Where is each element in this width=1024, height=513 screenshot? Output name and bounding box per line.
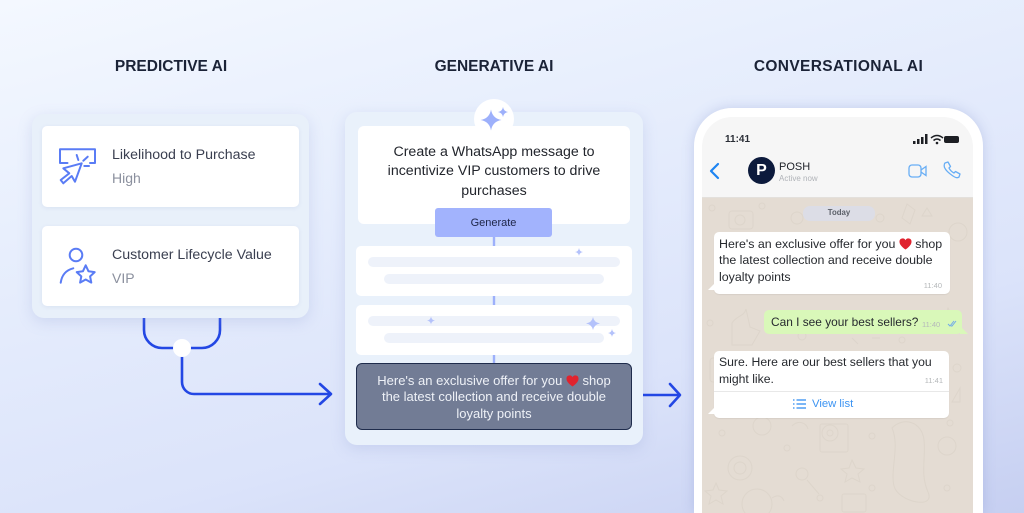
placeholder bar <box>368 316 620 326</box>
message: offer <box>714 232 950 294</box>
wallpaper doodles <box>702 198 973 513</box>
label: likelihood to purchase: Likelihood to Purchase <box>112 147 256 163</box>
placeholder bar <box>384 274 604 284</box>
divider <box>714 391 949 392</box>
reply text: might like. <box>719 372 774 386</box>
bubble tail <box>960 328 968 334</box>
contact name: POSH <box>779 161 810 173</box>
prompt text: Create a WhatsApp message to <box>393 144 595 160</box>
reply text <box>719 355 932 386</box>
card: generated message <box>356 363 632 430</box>
bubble tail <box>708 284 714 290</box>
generated message text <box>377 372 611 421</box>
back chevron <box>710 162 720 180</box>
question text: Can I see your best sellers? <box>771 315 918 329</box>
icon: person with star <box>60 248 96 284</box>
icon: cursor click <box>59 148 96 184</box>
icon: list <box>793 399 806 409</box>
icon: sparkles badge <box>474 99 514 139</box>
timestamp: 11:41 <box>925 376 943 385</box>
message: best sellers reply <box>714 351 949 418</box>
chat area <box>702 197 973 513</box>
heading: predictive AI: PREDICTIVE AI <box>115 58 227 75</box>
sparkle group <box>427 317 616 337</box>
icon: video call <box>908 164 927 178</box>
contact status: Active now <box>779 174 818 183</box>
placeholder bar <box>384 333 604 343</box>
timestamp: 11:40 <box>924 281 942 290</box>
card: prompt <box>358 126 630 224</box>
date pill: Today <box>828 208 850 217</box>
bubble tail <box>708 408 714 414</box>
button: generate: Generate <box>471 217 516 229</box>
date pill <box>803 206 875 221</box>
button: generate <box>435 208 552 237</box>
placeholder bar <box>368 257 620 267</box>
heading: conversational AI: CONVERSATIONAL AI <box>754 58 923 75</box>
view list link: View list <box>812 398 853 410</box>
message: question <box>764 310 962 334</box>
value: high: High <box>112 170 141 186</box>
avatar: POSH <box>748 157 775 184</box>
panel: predictive AI <box>32 114 309 318</box>
generated message text: Here's an exclusive offer for you shop <box>377 372 611 388</box>
status icons <box>913 134 959 144</box>
prompt text: purchases <box>461 183 527 199</box>
avatar: POSH: P <box>756 162 767 179</box>
prompt text: incentivize VIP customers to drive <box>388 163 600 179</box>
offer text: Here's an exclusive offer for you shop <box>719 236 942 250</box>
card: placeholder 1 <box>356 246 632 296</box>
connector arrow from predictive to generative <box>142 318 332 406</box>
card: placeholder 2 <box>356 305 632 355</box>
connector line <box>492 237 496 363</box>
prompt text <box>388 144 600 199</box>
label: customer lifecycle value: Customer Lifecycle Value <box>112 247 272 263</box>
timestamp: 11:40 <box>922 320 940 329</box>
panel: generative AI <box>345 112 643 445</box>
arrow: generative to conversational <box>643 382 682 408</box>
generated message text: loyalty points <box>456 406 532 421</box>
value: VIP: VIP <box>112 270 135 286</box>
generated message text: the latest collection and receive double <box>382 389 606 404</box>
card: customer lifecycle value <box>42 226 299 306</box>
card: likelihood to purchase <box>42 126 299 207</box>
offer text <box>719 236 942 284</box>
sparkle <box>575 248 583 256</box>
status time: 11:41 <box>725 134 750 145</box>
offer text: loyalty points <box>719 270 791 284</box>
reply text: Sure. Here are our best sellers that you <box>719 355 932 369</box>
phone mockup <box>694 108 983 513</box>
read ticks <box>948 320 956 327</box>
phone screen <box>702 117 973 513</box>
sparkles <box>480 107 508 130</box>
icon: phone call <box>944 161 961 178</box>
heading: generative AI: GENERATIVE AI <box>435 58 553 75</box>
offer text: the latest collection and receive double <box>719 253 933 267</box>
